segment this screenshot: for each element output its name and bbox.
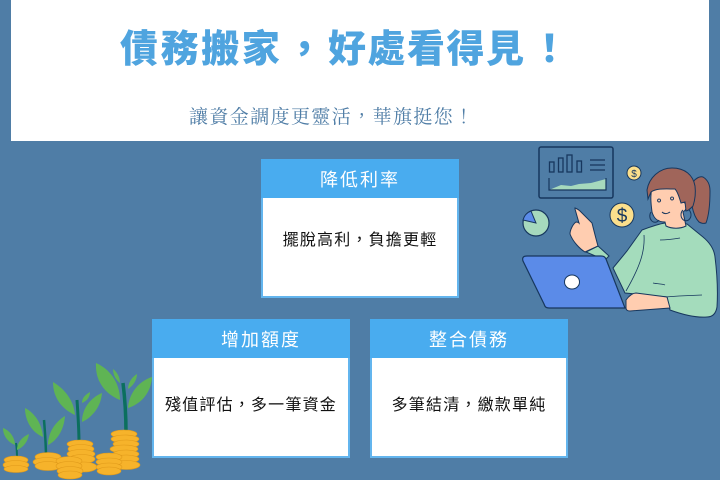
title: 好處看得見 xyxy=(328,29,526,71)
subtitle: 讓資金調度更靈活，華旗挺您！ xyxy=(189,107,475,128)
title: ！ xyxy=(531,29,571,71)
laptop xyxy=(523,256,625,308)
pointing hand xyxy=(570,208,598,252)
card text: 殘值評估，多一筆資金 xyxy=(165,397,337,414)
icon: large coin: $ xyxy=(617,206,628,227)
coin stack 4 xyxy=(56,456,83,479)
plant 2 xyxy=(25,408,65,458)
earrings xyxy=(650,210,691,222)
hair xyxy=(647,168,695,211)
icon: pie chart xyxy=(523,210,549,236)
coin stack 3 xyxy=(67,440,97,472)
icon: chart board xyxy=(539,147,613,198)
coin stack 2 xyxy=(33,452,61,470)
coin stack 6 xyxy=(96,453,122,475)
card: increase credit xyxy=(152,319,350,458)
plant 3 xyxy=(53,382,102,443)
card heading xyxy=(370,319,568,358)
face xyxy=(651,184,687,228)
card heading: 降低利率 xyxy=(320,170,400,190)
coin stack 5 xyxy=(110,430,140,470)
icon: large coin xyxy=(610,203,634,227)
torso xyxy=(613,223,717,317)
icon: small coin xyxy=(627,166,641,180)
facial features xyxy=(658,197,674,214)
card heading xyxy=(261,159,459,198)
woman figure xyxy=(523,168,717,317)
card: consolidate debt xyxy=(370,319,568,458)
sweater fold lines xyxy=(626,235,702,297)
title: ， xyxy=(285,29,326,71)
card text: 擺脫高利，負擔更輕 xyxy=(283,232,437,249)
top white title panel xyxy=(11,0,709,141)
plant 4 xyxy=(96,363,152,433)
icon: small coin: $ xyxy=(631,169,637,180)
card heading: 整合債務 xyxy=(429,330,509,350)
plant 1 xyxy=(3,428,29,459)
sleeve cuff xyxy=(586,246,609,260)
card: lower interest rate xyxy=(261,159,459,298)
coin stack 1 xyxy=(3,456,29,472)
resting hand xyxy=(626,293,670,311)
ponytail xyxy=(692,177,710,223)
title xyxy=(120,28,571,71)
card heading xyxy=(152,319,350,358)
card heading: 增加額度 xyxy=(221,330,301,350)
title: 債務搬家 xyxy=(120,29,282,71)
card text: 多筆結清，繳款單純 xyxy=(392,397,546,414)
